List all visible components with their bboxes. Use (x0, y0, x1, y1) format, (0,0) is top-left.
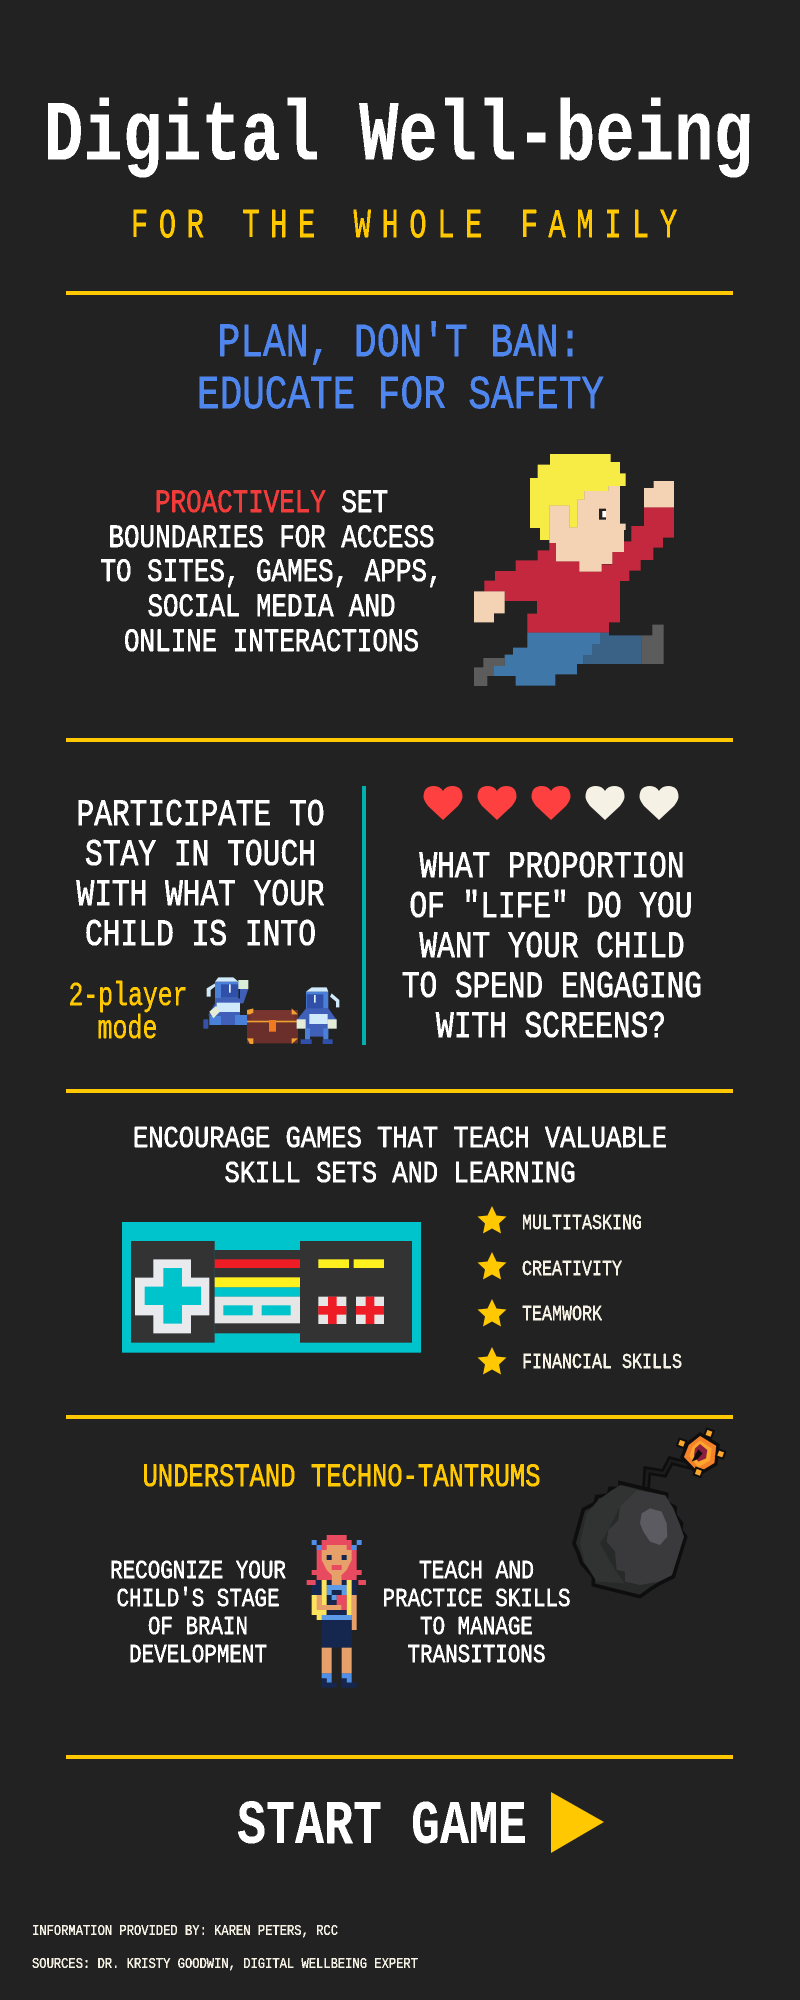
text block: proportion of life (402, 847, 702, 1049)
text block: teach skills (382, 1556, 570, 1670)
heading: EDUCATE FOR SAFETY (197, 370, 604, 423)
text block: recognize stage: OF BRAIN (148, 1612, 248, 1642)
icon: two knights and treasure chest (203, 977, 339, 1044)
star: multitasking (478, 1206, 642, 1236)
text block: proactively set boundaries: PROACTIVELY SET (155, 485, 388, 522)
text block: proportion of life: OF "LIFE" DO YOU (410, 887, 692, 929)
text block: proportion of life: WANT YOUR CHILD (420, 927, 684, 969)
footer credits: INFORMATION PROVIDED BY: KAREN PETERS, RCC (32, 1923, 338, 1940)
heading: PLAN, DON'T BAN: (218, 318, 582, 371)
icon: five hearts (424, 786, 678, 820)
panel: plan, don't ban (100, 318, 674, 686)
icon: bomb (574, 1429, 725, 1597)
text block: teach skills: TRANSITIONS (408, 1640, 546, 1670)
icon: game controller (122, 1222, 421, 1353)
panel: participate (68, 786, 702, 1049)
subtitle: FOR THE WHOLE FAMILY (131, 203, 688, 250)
text block: participate: CHILD IS INTO (85, 915, 316, 957)
star: teamwork: TEAMWORK (522, 1304, 602, 1327)
header (44, 88, 753, 250)
text block: participate: STAY IN TOUCH (85, 835, 316, 877)
text block: teach skills: TO MANAGE (420, 1612, 533, 1642)
text block: participate (76, 795, 324, 957)
skill list with stars (478, 1206, 682, 1375)
text block: teach skills: TEACH AND (419, 1556, 534, 1586)
panel: encourage games (122, 1122, 682, 1375)
heading: ENCOURAGE GAMES THAT TEACH VALUABLE (133, 1122, 667, 1157)
text block: proactively set boundaries: BOUNDARIES FOR ACCESS (108, 520, 434, 557)
text block: proactively set boundaries: ONLINE INTERACTIONS (124, 624, 419, 661)
label: 2-player mode (68, 978, 188, 1048)
label: 2-player mode: mode (98, 1011, 158, 1048)
star: financial skills (478, 1347, 682, 1375)
label: 2-player mode: 2-player (68, 978, 188, 1015)
text block: recognize stage: DEVELOPMENT (129, 1640, 267, 1670)
panel: techno-tantrums (110, 1429, 725, 1688)
heading: UNDERSTAND TECHNO-TANTRUMS (142, 1459, 540, 1496)
heading (133, 1122, 667, 1192)
text block: recognize stage: RECOGNIZE YOUR (110, 1556, 286, 1586)
text block: recognize stage (110, 1556, 286, 1670)
star: creativity (478, 1252, 622, 1282)
icon: girl with tablet (307, 1535, 366, 1688)
arrow: play triangle (551, 1792, 604, 1853)
footer credits: SOURCES: DR. KRISTY GOODWIN, DIGITAL WELLBEING EXPERT (32, 1956, 418, 1973)
star: creativity: CREATIVITY (522, 1259, 622, 1282)
text block: proactively set boundaries (100, 485, 442, 661)
text block: proactively set boundaries: TO SITES, GAMES, APPS, (100, 554, 442, 591)
star: financial skills: FINANCIAL SKILLS (522, 1352, 682, 1375)
text block: recognize stage: CHILD'S STAGE (116, 1584, 280, 1614)
star: multitasking: MULTITASKING (522, 1213, 642, 1236)
text block: participate: WITH WHAT YOUR (76, 875, 324, 917)
footer credits (32, 1923, 418, 1973)
call to action: start game: START GAME (237, 1791, 527, 1862)
text block: proportion of life: WHAT PROPORTION (420, 847, 684, 889)
text block: proportion of life: TO SPEND ENGAGING (402, 967, 702, 1009)
icon: running boy (474, 454, 674, 686)
text block: proportion of life: WITH SCREENS? (436, 1007, 666, 1049)
star: teamwork (478, 1299, 602, 1327)
text block: participate: PARTICIPATE TO (76, 795, 324, 837)
text block: teach skills: PRACTICE SKILLS (382, 1584, 570, 1614)
heading (197, 318, 604, 423)
heading: SKILL SETS AND LEARNING (224, 1157, 576, 1192)
text block: proactively set boundaries: SOCIAL MEDIA AND (148, 589, 396, 626)
